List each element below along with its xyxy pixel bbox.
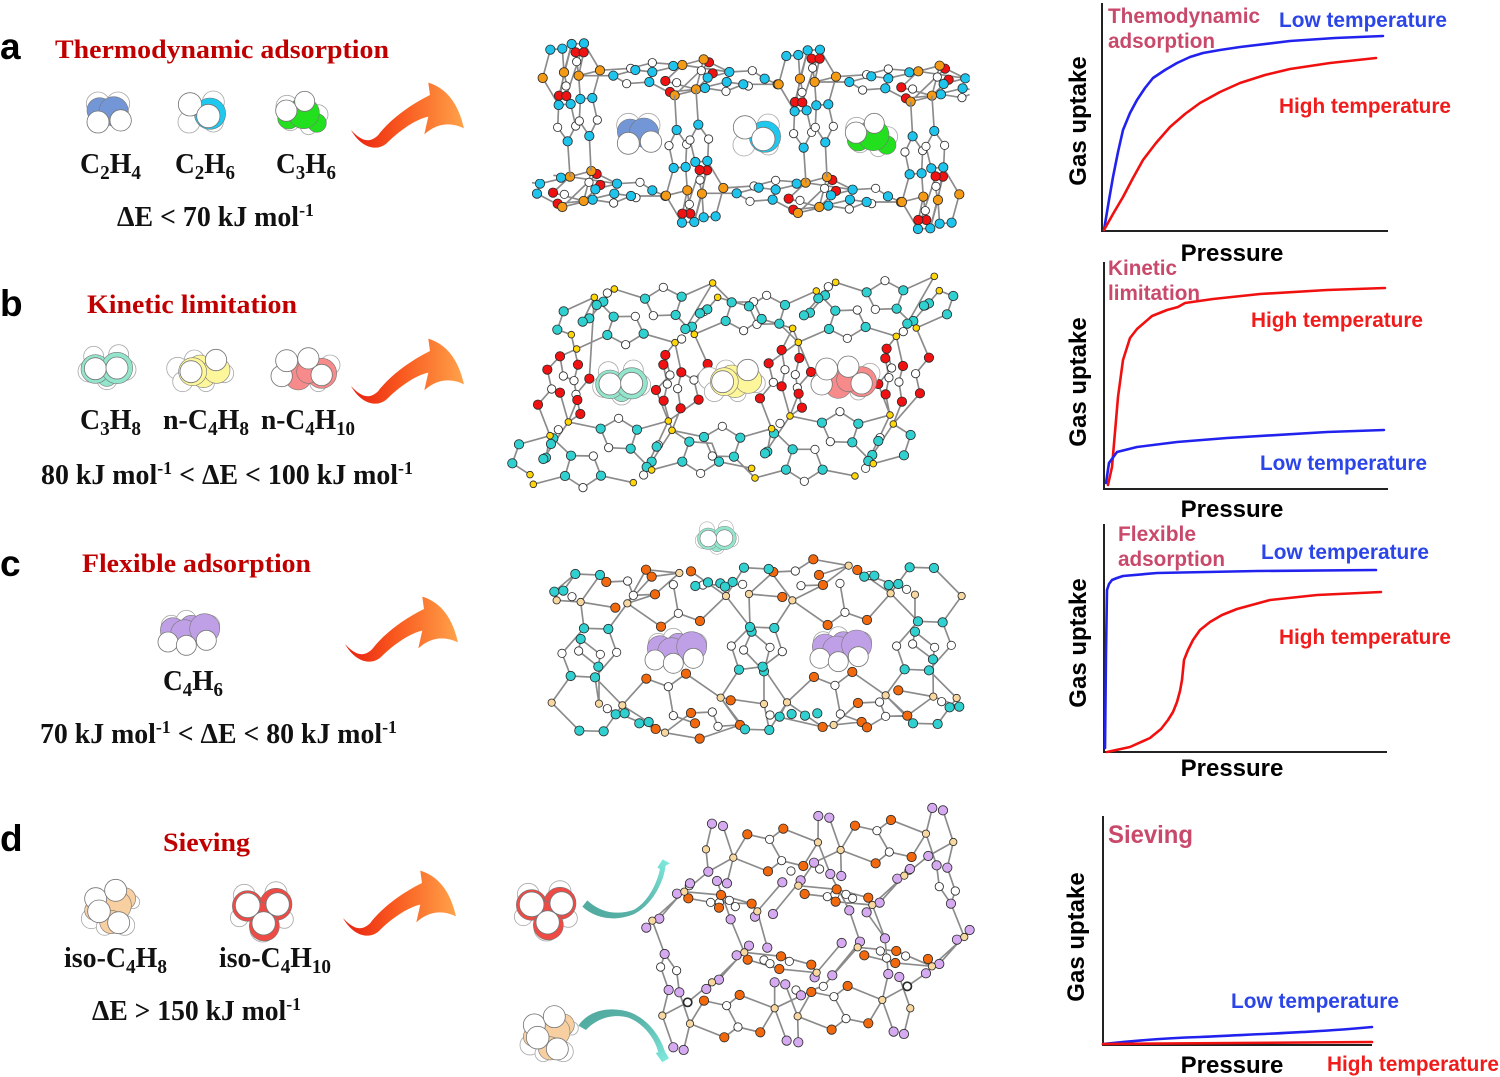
guest molecule C2H6 [733, 114, 781, 156]
chart c: Low temperature [1261, 541, 1429, 564]
formula labels: 4 [305, 418, 315, 440]
formula labels: n-C [163, 404, 210, 436]
arrow to framework [345, 597, 458, 662]
teal arrow lower [578, 1009, 669, 1062]
formula labels: H [290, 942, 312, 974]
chart b [1065, 257, 1427, 523]
molecule iso-C4H8 rejected [520, 1006, 578, 1062]
chart c: adsorption [1118, 548, 1225, 571]
guest molecule C2H4 [617, 113, 662, 154]
energy range: -1 [156, 717, 171, 737]
formula labels: C [80, 148, 101, 180]
icon: n-C4H10 molecule [271, 348, 340, 392]
formula labels: iso-C [64, 942, 128, 974]
formula labels: C [80, 404, 101, 436]
framework d [642, 803, 974, 1055]
chart b: High temperature [1251, 309, 1423, 332]
energy range: -1 [398, 458, 413, 478]
formula labels: 4 [131, 162, 141, 184]
heading: Sieving: Sieving [163, 828, 250, 857]
energy range: 80 kJ mol [41, 460, 158, 491]
framework c [548, 555, 965, 743]
chart b: Low temperature [1260, 452, 1427, 475]
chart b: limitation [1108, 282, 1200, 305]
formula labels: 8 [157, 956, 167, 978]
formula labels: 4 [126, 956, 136, 978]
icon: C3H8 molecule [78, 345, 136, 390]
formula labels: 3 [100, 418, 110, 440]
chart a: Gas uptake [1065, 56, 1092, 186]
chart a: Themodynamic [1108, 5, 1260, 28]
arrow to framework [351, 339, 464, 404]
panel letter c: c [0, 543, 21, 584]
formula labels: H [305, 148, 327, 180]
energy range: < ΔE < 100 kJ mol [172, 460, 398, 491]
panel c: flexible adsorption [0, 520, 1451, 782]
formula labels: 4 [281, 956, 290, 978]
energy range: ΔE > 150 kJ mol [92, 996, 289, 1027]
teal arrow upper [582, 859, 670, 918]
icon: C4H6 molecule [158, 610, 220, 655]
panel b: kinetic limitation [0, 257, 1427, 523]
panel letter a: a [0, 26, 21, 67]
chart b: Pressure [1181, 496, 1283, 523]
icon: iso-C4H10 molecule [230, 882, 293, 942]
formula labels: H [315, 404, 336, 436]
heading: Thermodynamic adsorption: Thermodynamic adsorption [55, 35, 390, 64]
formula labels: 2 [100, 162, 110, 184]
chart a: adsorption [1108, 30, 1215, 53]
chart b: Gas uptake [1065, 317, 1092, 447]
formula label: C [163, 665, 184, 697]
formula labels [64, 942, 331, 978]
energy range: 70 kJ mol [40, 719, 157, 750]
heading: Kinetic limitation: Kinetic limitation [87, 290, 298, 319]
guest molecule n-C4H10 [811, 356, 880, 400]
chart c: Pressure [1181, 755, 1283, 782]
panel a: thermodynamic adsorption [0, 3, 1451, 267]
chart a: Low temperature [1279, 9, 1447, 32]
formula labels: H [204, 148, 226, 180]
guest molecule C3H6 [845, 113, 898, 157]
framework b [508, 273, 958, 492]
panel letter b: b [0, 283, 23, 324]
sieving illustration [514, 803, 974, 1062]
energy range: -1 [286, 994, 301, 1014]
formula labels: n-C [261, 404, 308, 436]
energy range: ΔE < 70 kJ mol [117, 202, 300, 233]
guest molecule C4H6 left [645, 628, 707, 673]
energy range: < ΔE < 80 kJ mol [171, 719, 382, 750]
energy range: -1 [382, 717, 397, 737]
chart a: Pressure [1181, 240, 1283, 267]
formula label: 4 [183, 679, 192, 701]
formula labels: C [276, 148, 297, 180]
energy range: -1 [299, 200, 314, 220]
panel letter d: d [0, 818, 23, 859]
icon: iso-C4H8 molecule [81, 879, 140, 935]
icon: n-C4H8 molecule [167, 349, 234, 392]
arrow to framework [343, 871, 456, 936]
formula labels: H [110, 148, 132, 180]
chart a [1065, 3, 1451, 267]
excluded C3H8 molecule [695, 520, 739, 554]
chart d: Sieving [1108, 821, 1193, 849]
formula labels: H [218, 404, 240, 436]
heading: Flexible adsorption: Flexible adsorption [82, 549, 312, 578]
formula label: H [192, 665, 214, 697]
chart a: High temperature [1279, 95, 1451, 118]
guest molecule n-C4H8 [698, 359, 765, 402]
chart c: Flexible [1118, 523, 1196, 546]
formula labels: 2 [195, 162, 204, 184]
chart d [1063, 816, 1499, 1077]
guest molecule C4H6 right [810, 627, 872, 672]
formula labels: 8 [239, 418, 249, 440]
chart c [1065, 523, 1451, 782]
formula labels: C [175, 148, 196, 180]
framework a [466, 39, 1018, 234]
chart d: Gas uptake [1063, 872, 1090, 1002]
formula labels: 3 [296, 162, 305, 184]
energy range: -1 [157, 458, 172, 478]
chart c: High temperature [1279, 626, 1451, 649]
formula labels: iso-C [219, 942, 283, 974]
formula labels [80, 404, 355, 440]
icon: C2H6 molecule [178, 91, 226, 133]
formula labels: H [136, 942, 158, 974]
icon: C3H6 molecule [276, 91, 328, 135]
arrow to framework [351, 83, 464, 148]
icon: C2H4 molecule [86, 92, 131, 133]
formula labels: 4 [208, 418, 218, 440]
formula labels: 6 [327, 162, 336, 184]
formula labels: H [110, 404, 132, 436]
chart d: High temperature [1327, 1053, 1499, 1076]
molecule iso-C4H10 rejected [514, 881, 577, 941]
chart d: Low temperature [1231, 990, 1399, 1013]
chart c: Gas uptake [1065, 578, 1092, 708]
chart b: Kinetic [1108, 257, 1177, 280]
formula label: 6 [214, 679, 223, 701]
panel d: sieving [0, 803, 1499, 1077]
formula labels [80, 148, 336, 184]
formula labels: 8 [131, 418, 141, 440]
guest molecule C3H8 [593, 360, 651, 405]
formula labels: 6 [226, 162, 235, 184]
formula labels: 10 [312, 956, 331, 978]
formula labels: 10 [336, 418, 355, 440]
